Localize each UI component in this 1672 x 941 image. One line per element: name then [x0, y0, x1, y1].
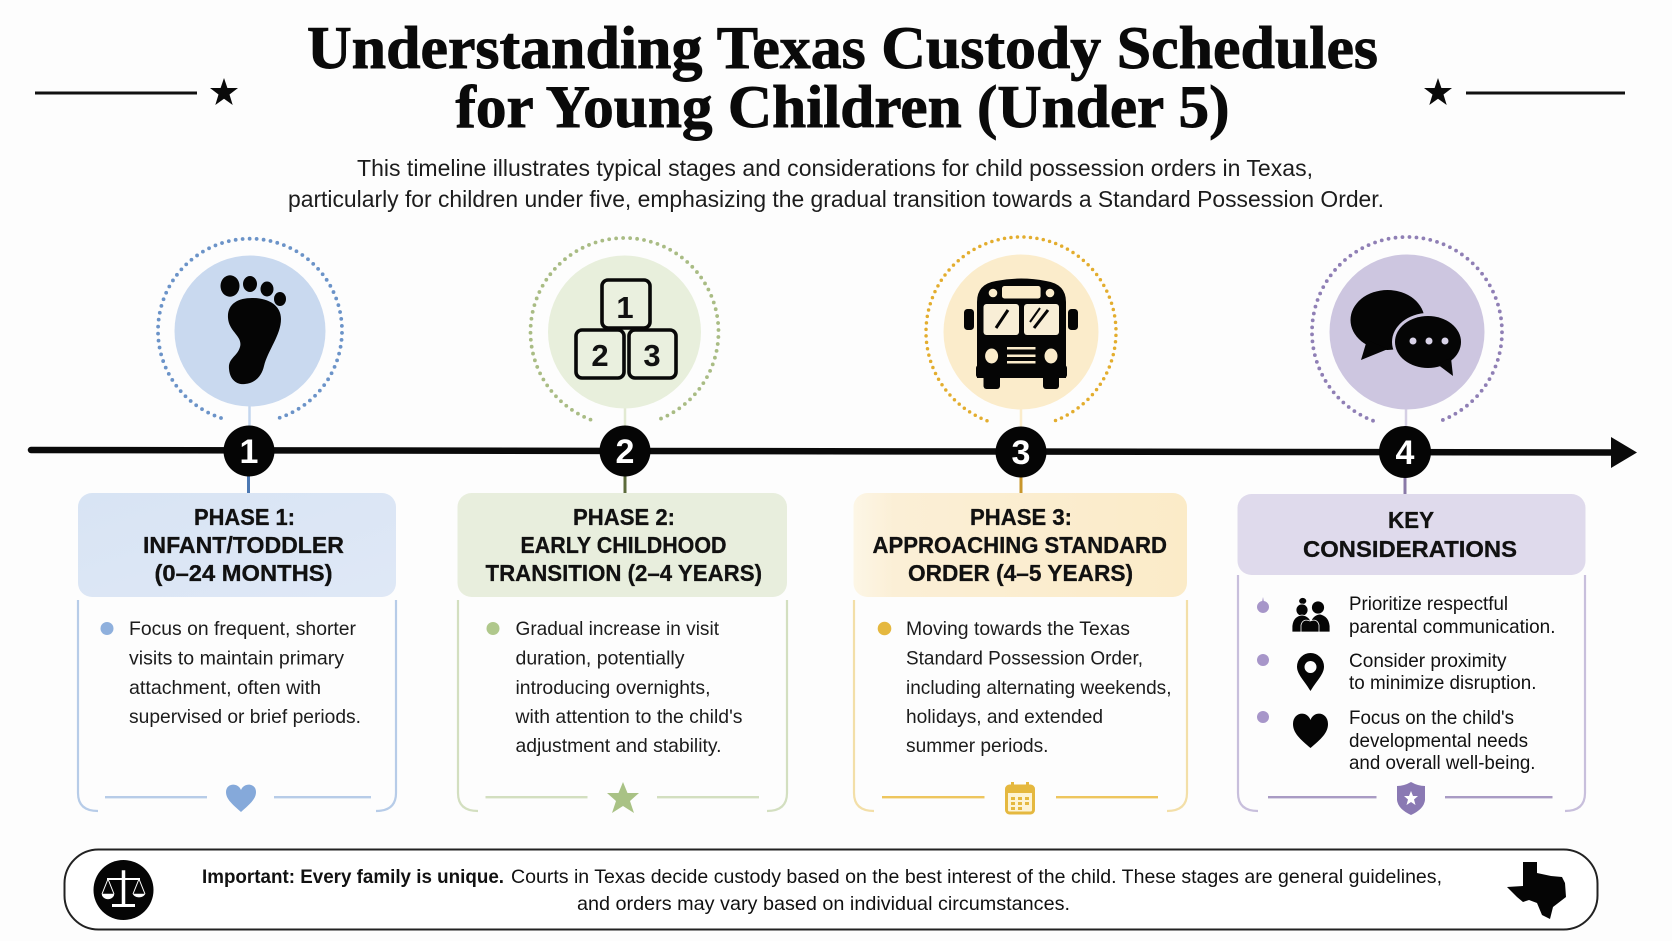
number badge 4: 4	[1396, 434, 1415, 472]
heading: phase 2: TRANSITION (2–4 YEARS)	[486, 560, 762, 586]
header	[35, 15, 1625, 212]
left star ornament	[35, 78, 238, 105]
number badge 4	[1379, 426, 1431, 478]
title: Understanding Texas Custody Schedules	[307, 15, 1378, 81]
bullet text: phase 3: Moving towards the Texas	[906, 618, 1130, 640]
dotted ring: phase 2	[530, 238, 718, 420]
icon: heart divider	[105, 785, 371, 812]
bullet text: phase 2: duration, potentially	[516, 648, 685, 670]
circle: phase 1	[174, 256, 326, 406]
title	[307, 15, 1378, 140]
dotted ring: phase 1	[158, 239, 342, 418]
bullet text: phase 3: summer periods.	[906, 735, 1048, 757]
icon: scales of justice	[94, 860, 154, 920]
phase 1 marker	[158, 239, 342, 493]
timeline arrow	[31, 437, 1637, 468]
bullet text: phase 3: Standard Possession Order,	[906, 648, 1143, 670]
circle: phase 2	[548, 256, 701, 408]
callout: important note	[64, 850, 1598, 930]
item: respectful communication: Prioritize respectful	[1349, 593, 1508, 615]
key considerations marker	[1312, 237, 1502, 494]
bullet text: phase 2: introducing overnights,	[516, 677, 710, 699]
bullet text: phase 2: adjustment and stability.	[516, 735, 722, 757]
heading: phase 3: ORDER (4–5 YEARS)	[908, 560, 1133, 586]
heading: phase 1: PHASE 1:	[194, 504, 295, 530]
note text: Courts in Texas decide custody based on the best interest of the child. These stages are general guidelines,	[511, 866, 1442, 888]
icon: footprint	[220, 275, 286, 384]
icon: star divider	[486, 782, 759, 813]
bullet text: phase 1: Focus on frequent, shorter	[129, 618, 356, 640]
bullet text: phase 2	[486, 618, 743, 757]
subtitle: This timeline illustrates typical stages and considerations for child possession orders in Texas,	[357, 155, 1313, 181]
icon: speech bubbles	[1350, 290, 1464, 376]
heading: key considerations: CONSIDERATIONS	[1303, 536, 1517, 562]
icon: calendar divider	[882, 782, 1158, 813]
item: proximity	[1257, 650, 1536, 694]
bullet text: phase 3: including alternating weekends,	[906, 677, 1172, 699]
number badge 1: 1	[240, 433, 258, 471]
item: proximity: Consider proximity	[1349, 650, 1507, 672]
heading: phase 1: (0–24 MONTHS)	[154, 560, 332, 586]
icon: Texas map	[1507, 862, 1566, 919]
icon: number blocks: 1	[616, 290, 634, 325]
dotted ring: key considerations	[1312, 237, 1502, 421]
right star ornament	[1424, 78, 1625, 105]
bullet text: phase 1: supervised or brief periods.	[129, 706, 361, 728]
heading: phase 1	[78, 493, 396, 597]
bullet text: phase 3	[878, 618, 1172, 757]
icon: map pin	[1297, 653, 1324, 691]
subtitle	[288, 155, 1384, 212]
item: respectful communication	[1257, 593, 1556, 638]
bullet text: phase 2: Gradual increase in visit	[516, 618, 720, 640]
number badge 2	[600, 426, 650, 476]
phase 2 marker	[530, 238, 718, 493]
panel: key considerations	[1238, 494, 1586, 815]
panel: phase 3	[854, 493, 1187, 813]
icon: black heart	[1293, 714, 1328, 748]
bullet text: phase 3: holidays, and extended	[906, 706, 1103, 728]
item: proximity: to minimize disruption.	[1349, 672, 1536, 694]
icon: shield divider	[1268, 782, 1552, 815]
heading: phase 2: PHASE 2:	[573, 504, 675, 530]
icon: number blocks: 2	[591, 338, 609, 373]
panel: phase 1	[78, 493, 396, 812]
bullet text: phase 1: attachment, often with	[129, 677, 321, 699]
item: child's needs: Focus on the child's	[1349, 707, 1514, 729]
heading: phase 3: APPROACHING STANDARD	[872, 532, 1167, 558]
dotted ring: phase 3	[926, 237, 1116, 421]
number badge 1	[224, 426, 274, 476]
item: child's needs: developmental needs	[1349, 730, 1528, 752]
heading: phase 3: PHASE 3:	[970, 504, 1072, 530]
icon: school bus	[964, 278, 1078, 389]
bullet text: phase 1	[100, 618, 361, 728]
number badge 2: 2	[616, 433, 634, 471]
bullet text: phase 2: with attention to the child's	[515, 706, 743, 728]
item: child's needs	[1257, 707, 1536, 774]
number badge 3: 3	[1012, 434, 1030, 472]
phase 3 marker	[926, 237, 1116, 493]
title: for Young Children (Under 5)	[456, 74, 1230, 140]
panel: phase 2	[458, 493, 787, 813]
heading: key considerations: KEY	[1388, 507, 1434, 533]
heading: phase 2	[458, 493, 787, 597]
number badge 3	[996, 426, 1046, 478]
heading: phase 2: EARLY CHILDHOOD	[520, 532, 726, 558]
circle: phase 3	[944, 254, 1098, 410]
icon: parents	[1292, 598, 1330, 632]
icon: number blocks	[576, 280, 676, 378]
item: child's needs: and overall well-being.	[1349, 752, 1536, 774]
note text: Important: Every family is unique.	[202, 866, 504, 888]
heading: key considerations	[1238, 494, 1586, 575]
circle: key considerations	[1330, 254, 1484, 410]
item: respectful communication: parental communication.	[1349, 616, 1556, 638]
subtitle: particularly for children under five, emphasizing the gradual transition towards a Standard Possession Order.	[288, 186, 1384, 212]
note text: and orders may vary based on individual circumstances.	[577, 893, 1070, 915]
bullet text: phase 1: visits to maintain primary	[129, 648, 344, 670]
icon: number blocks: 3	[643, 338, 661, 373]
heading: phase 3	[854, 493, 1187, 597]
heading: phase 1: INFANT/TODDLER	[143, 532, 344, 558]
note text	[202, 866, 1442, 915]
